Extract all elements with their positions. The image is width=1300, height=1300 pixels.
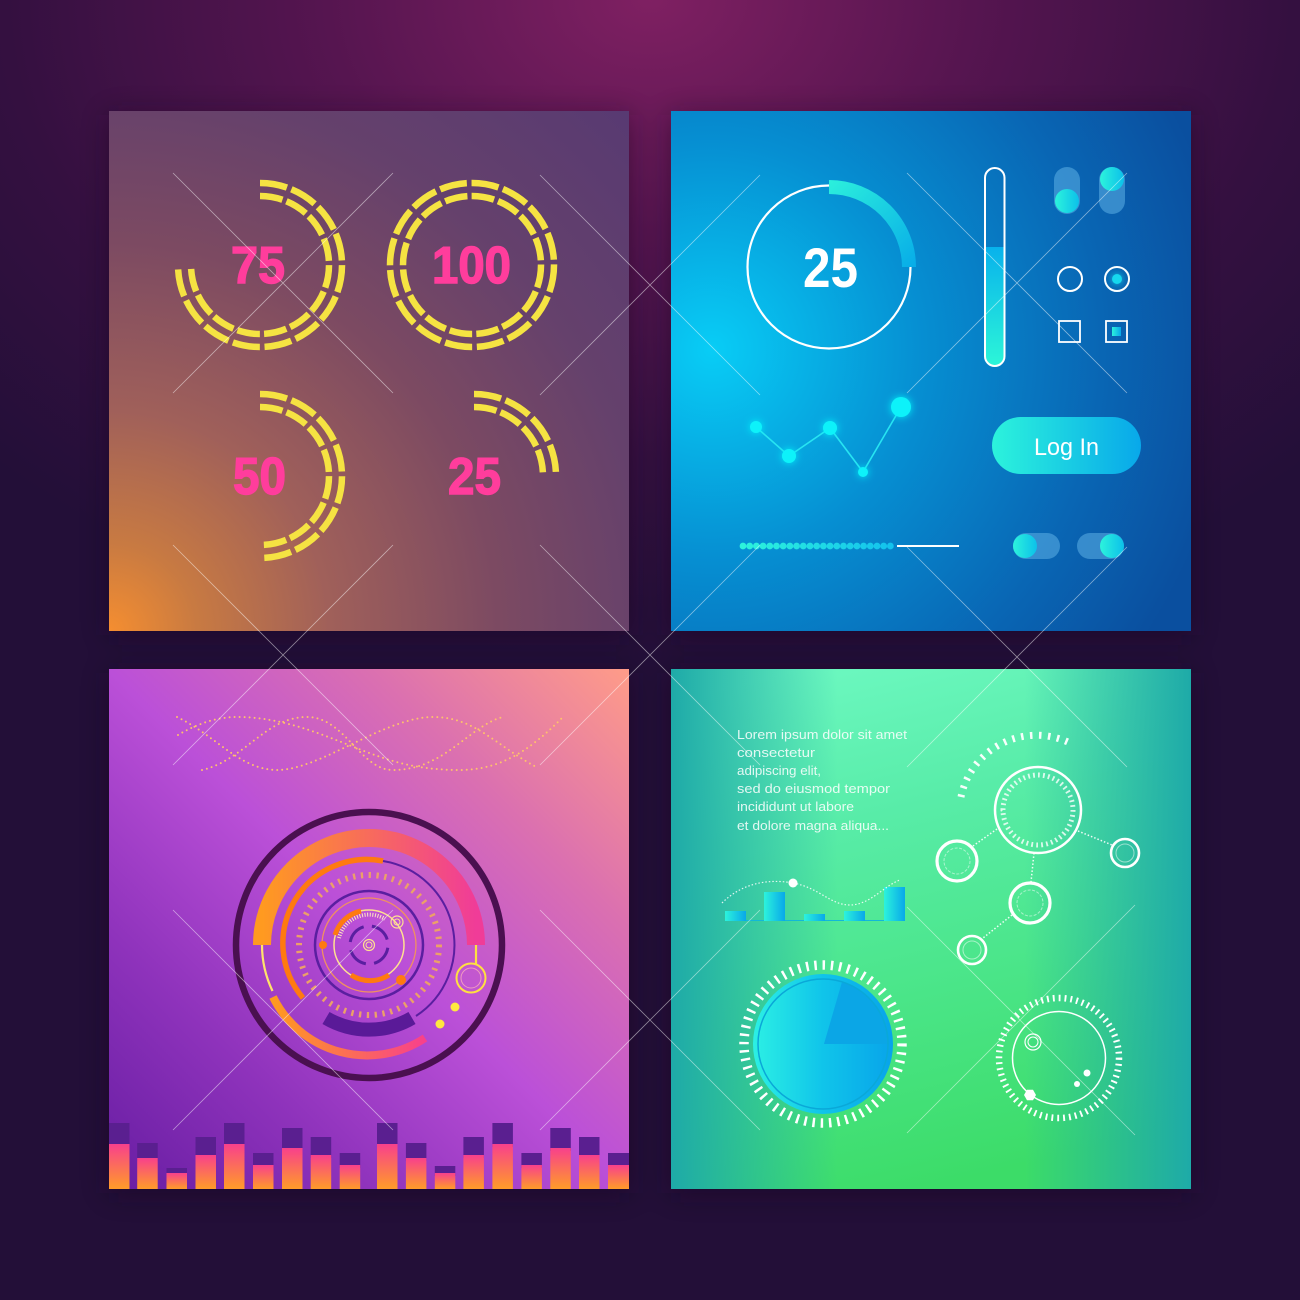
network diagram: [937, 735, 1139, 964]
panel shadows: [109, 115, 1191, 1193]
radio empty: [1058, 267, 1082, 291]
mini bar chart: [722, 878, 905, 921]
radial HUD: [236, 812, 502, 1078]
checkbox selected: [1106, 321, 1127, 342]
white dial: [999, 998, 1119, 1118]
horizontal toggle on: [1077, 533, 1124, 559]
gauge 50: [233, 394, 342, 558]
progress ring 25: [748, 186, 910, 348]
line chart: [750, 397, 911, 477]
lorem ipsum text block: sed do eiusmod tempor: [737, 782, 890, 796]
vertical toggle on: [1099, 167, 1125, 214]
lorem ipsum text block: Lorem ipsum dolor sit amet: [737, 728, 908, 742]
gauge 50: 50: [233, 448, 286, 506]
radio selected: [1105, 267, 1129, 291]
log in button: [992, 417, 1141, 474]
lorem ipsum text block: et dolore magna aliqua...: [737, 819, 889, 833]
blue pie knob: [744, 965, 902, 1123]
gauge 75: 75: [231, 237, 285, 295]
equalizer bars: [109, 1123, 629, 1189]
gauge 25: 25: [448, 448, 501, 506]
dotted waves: [177, 717, 563, 770]
log in button: Log In: [1034, 434, 1099, 461]
panel: UI controls: [671, 111, 1191, 631]
gauge 75: [178, 183, 342, 347]
lorem ipsum text block: [737, 728, 908, 833]
progress bar: [743, 543, 959, 549]
panel: circular gauges: [109, 111, 629, 631]
panel: text, network and dials: [671, 669, 1191, 1189]
gauge 100: 100: [432, 237, 511, 295]
progress ring 25: 25: [803, 236, 858, 299]
lorem ipsum text block: consectetur: [737, 746, 815, 760]
vertical slider: [985, 168, 1004, 366]
lorem ipsum text block: adipiscing elit,: [737, 764, 821, 778]
panel: radial HUD and equalizer: [109, 669, 629, 1189]
gauge 100: [390, 183, 554, 347]
checkbox empty: [1059, 321, 1080, 342]
vertical toggle off: [1054, 167, 1080, 214]
thin diagonal crossing lines: [173, 173, 1135, 1135]
lorem ipsum text block: incididunt ut labore: [737, 800, 854, 814]
horizontal toggle off: [1013, 533, 1060, 559]
gauge 25: [448, 394, 556, 506]
